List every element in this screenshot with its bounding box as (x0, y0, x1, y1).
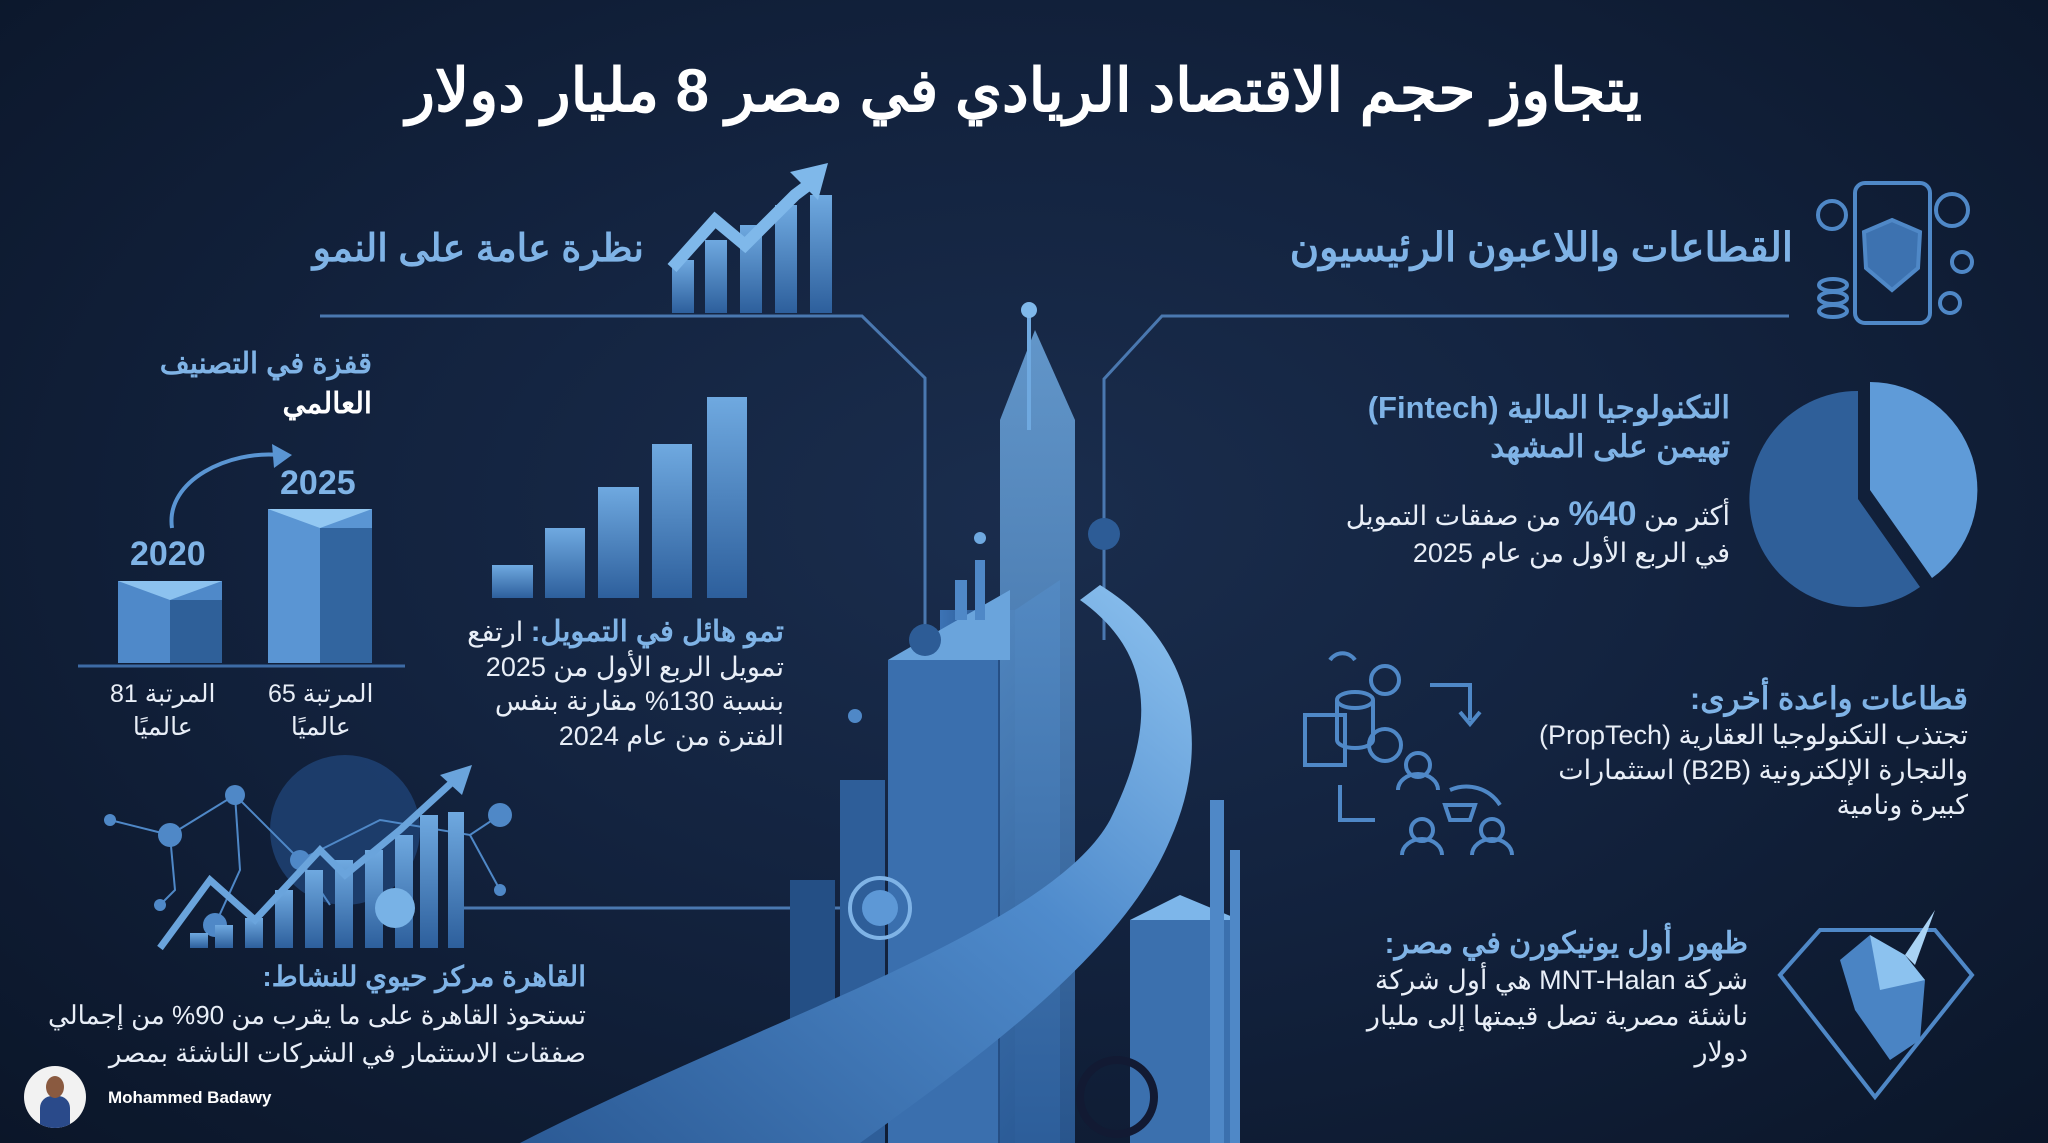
text: funding growth: تمو هائل في التمويل: ارتفع (467, 616, 784, 648)
text: Cairo hub: تستحوذ القاهرة على ما يقرب من 90% من إجمالي (48, 1000, 586, 1030)
heading: growth overview: نظرة عامة على النمو (313, 228, 644, 270)
text: funding growth: تمويل الربع الأول من 2025 (486, 652, 784, 682)
central city (520, 302, 1240, 1143)
text: unicorn: دولار (1694, 1037, 1748, 1067)
text: unicorn (1366, 922, 1748, 1068)
icon: phone security (1818, 183, 1972, 323)
icon: network globe (104, 755, 512, 948)
chart: global ranking (78, 444, 405, 666)
label: rank 65: عالميًا (291, 713, 351, 741)
text: other sectors: كبيرة ونامية (1836, 790, 1968, 820)
text: Cairo hub: القاهرة مركز حيوي للنشاط: (262, 961, 586, 992)
text: other sectors (1539, 677, 1968, 821)
text: funding growth (467, 616, 784, 752)
title: يتجاوز حجم الاقتصاد الريادي في مصر 8 مليار دولار (406, 57, 1642, 124)
chart: funding growth (492, 397, 747, 598)
icon: sectors network (1305, 653, 1512, 855)
text: funding growth: بنسبة 130% مقارنة بنفس (495, 686, 784, 716)
label: 2020: 2020 (130, 535, 206, 573)
label: rank 81: المرتبة 81 (110, 680, 215, 708)
label: rank 65: المرتبة 65 (268, 680, 373, 708)
text: fintech share: أكثر من 40% من صفقات التمويل (1346, 495, 1730, 533)
text: other sectors: قطاعات واعدة أخرى: (1690, 681, 1968, 716)
text: unicorn: ظهور أول يونيكورن في مصر: (1385, 927, 1748, 960)
author badge: Mohammed Badawy (108, 1088, 271, 1107)
label: 2025: 2025 (280, 464, 356, 502)
text: fintech: تهيمن على المشهد (1490, 429, 1730, 464)
connector lines (320, 316, 1789, 908)
text: ranking leap (160, 348, 372, 420)
heading: sectors and players: القطاعات واللاعبون الرئيسيون (1290, 226, 1793, 270)
label: rank 65 (268, 680, 373, 741)
icon: growth chart (672, 163, 832, 313)
text: other sectors: والتجارة الإلكترونية (B2B) استثمارات (1558, 755, 1968, 785)
text: unicorn: شركة MNT-Halan هي أول شركة (1375, 965, 1748, 995)
text: Cairo hub: صفقات الاستثمار في الشركات الناشئة بمصر (109, 1038, 586, 1068)
text: fintech (1368, 390, 1730, 466)
text: fintech share (1346, 495, 1730, 569)
text: funding growth: الفترة من عام 2024 (559, 720, 784, 750)
label: rank 81 (110, 680, 215, 741)
text: ranking leap: العالمي (282, 388, 372, 420)
text: fintech: التكنولوجيا المالية (Fintech) (1368, 390, 1730, 425)
text: fintech share: في الربع الأول من عام 2025 (1413, 538, 1730, 568)
label: rank 81: عالميًا (133, 713, 193, 741)
author badge (24, 1066, 272, 1128)
text: ranking leap: قفزة في التصنيف (160, 348, 372, 380)
chart: fintech pie (1749, 382, 1977, 607)
text: unicorn: ناشئة مصرية تصل قيمتها إلى مليار (1367, 1001, 1748, 1031)
text: Cairo hub (48, 961, 586, 1068)
text: other sectors: تجتذب التكنولوجيا العقارية (PropTech) (1539, 720, 1968, 750)
icon: unicorn diamond (1780, 910, 1972, 1097)
